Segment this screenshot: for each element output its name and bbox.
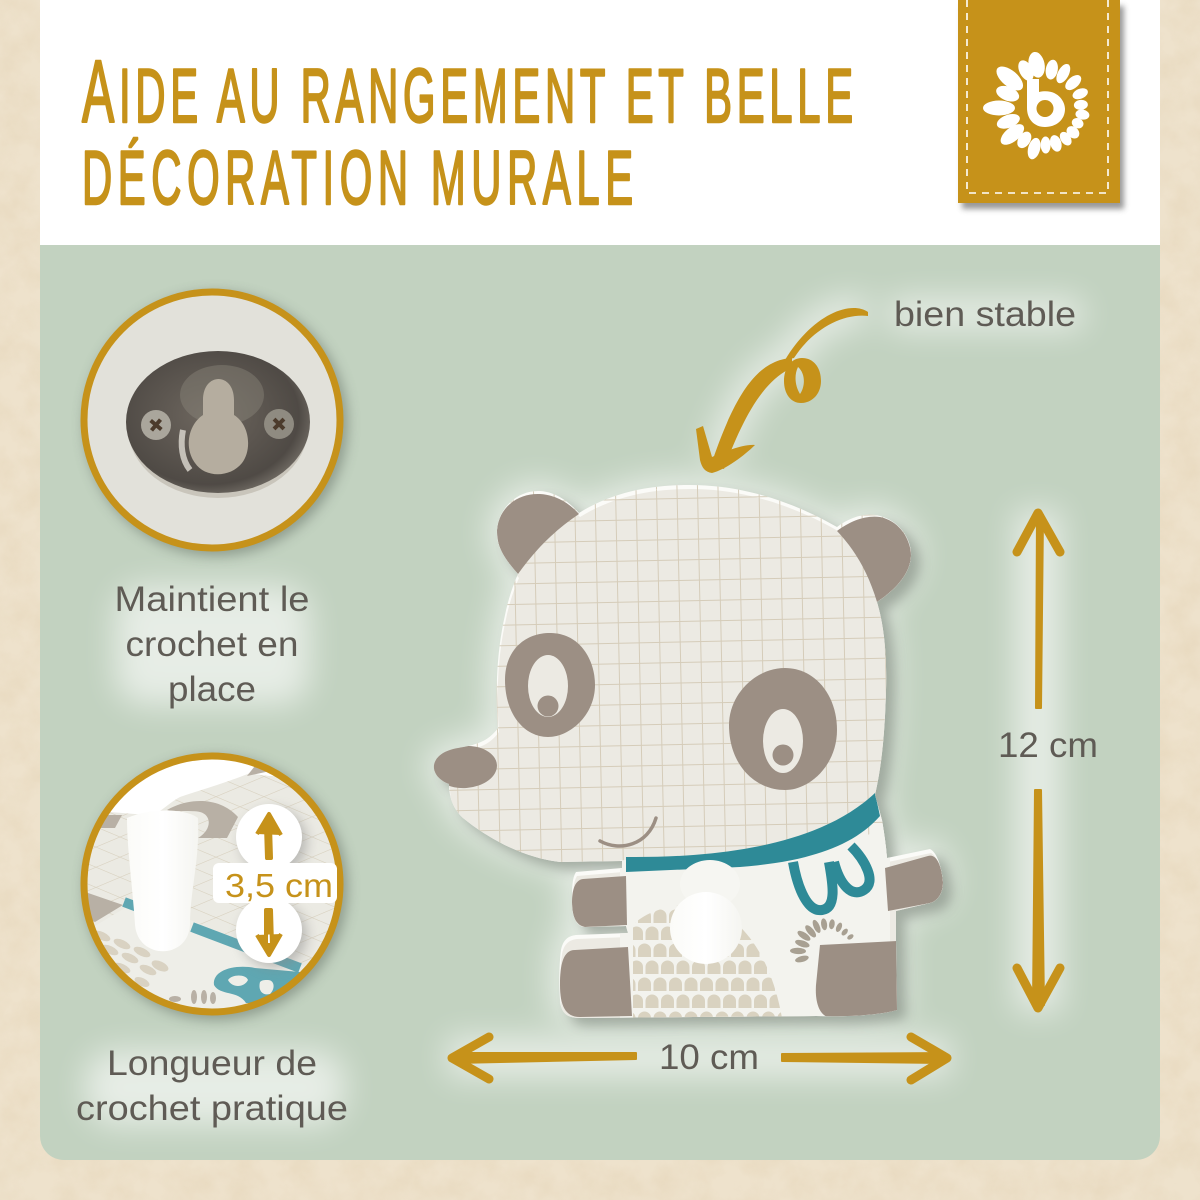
arrow: width left xyxy=(452,1037,636,1079)
label: longueur de crochet: crochet pratique xyxy=(76,1089,348,1128)
label: 12 cm: 12 cm xyxy=(998,726,1098,765)
nose xyxy=(434,746,497,788)
label: maintient le crochet: crochet en xyxy=(126,625,298,664)
arms and feet xyxy=(572,876,627,927)
panda coat hook xyxy=(430,470,952,1026)
right eye xyxy=(729,668,837,790)
ears xyxy=(497,494,579,574)
teal ribbon xyxy=(124,902,300,968)
arrow: height up xyxy=(1017,513,1060,708)
header band xyxy=(40,0,1160,245)
body lower white xyxy=(620,800,890,1020)
dome pattern xyxy=(626,905,786,1018)
left eye xyxy=(505,633,595,737)
panda face and body xyxy=(435,489,944,1022)
circle: hook length detail xyxy=(80,750,350,1020)
label: bien stable: bien stable xyxy=(894,295,1076,334)
green panel xyxy=(40,245,1160,1160)
white peg xyxy=(127,810,198,951)
icon: brand logo xyxy=(983,51,1090,161)
keyhole xyxy=(189,379,248,474)
label: longueur de crochet: Longueur de xyxy=(107,1044,317,1083)
hook peg xyxy=(670,860,742,964)
circle: keyhole detail xyxy=(84,292,348,556)
title: DÉCORATION MURALE xyxy=(82,135,633,220)
motif xyxy=(169,990,216,1004)
smile xyxy=(600,818,656,846)
arrow: curly to head xyxy=(696,308,868,473)
label: maintient le crochet: Maintient le xyxy=(114,580,310,619)
brand tag xyxy=(958,0,1124,209)
grid on head xyxy=(430,470,910,870)
title xyxy=(82,44,853,220)
body prints xyxy=(167,801,238,838)
label: maintient le crochet xyxy=(114,580,310,709)
label: longueur de crochet xyxy=(76,1044,348,1128)
label: maintient le crochet: place xyxy=(168,670,256,709)
hedgehog motif xyxy=(790,918,855,964)
dome rows xyxy=(96,930,168,987)
label: 10 cm: 10 cm xyxy=(659,1038,759,1077)
arrow: height down xyxy=(1017,790,1060,1008)
length badge xyxy=(213,804,337,963)
bib xyxy=(626,793,880,872)
white glows behind elements xyxy=(85,298,1085,1125)
metal plate xyxy=(130,444,306,498)
title: AIDE AU RANGEMENT ET BELLE xyxy=(82,44,853,142)
screws xyxy=(141,409,294,440)
shadows of number bubbles xyxy=(241,809,307,875)
arrow: width right xyxy=(782,1037,947,1080)
length badge: 3,5 cm xyxy=(225,867,333,904)
